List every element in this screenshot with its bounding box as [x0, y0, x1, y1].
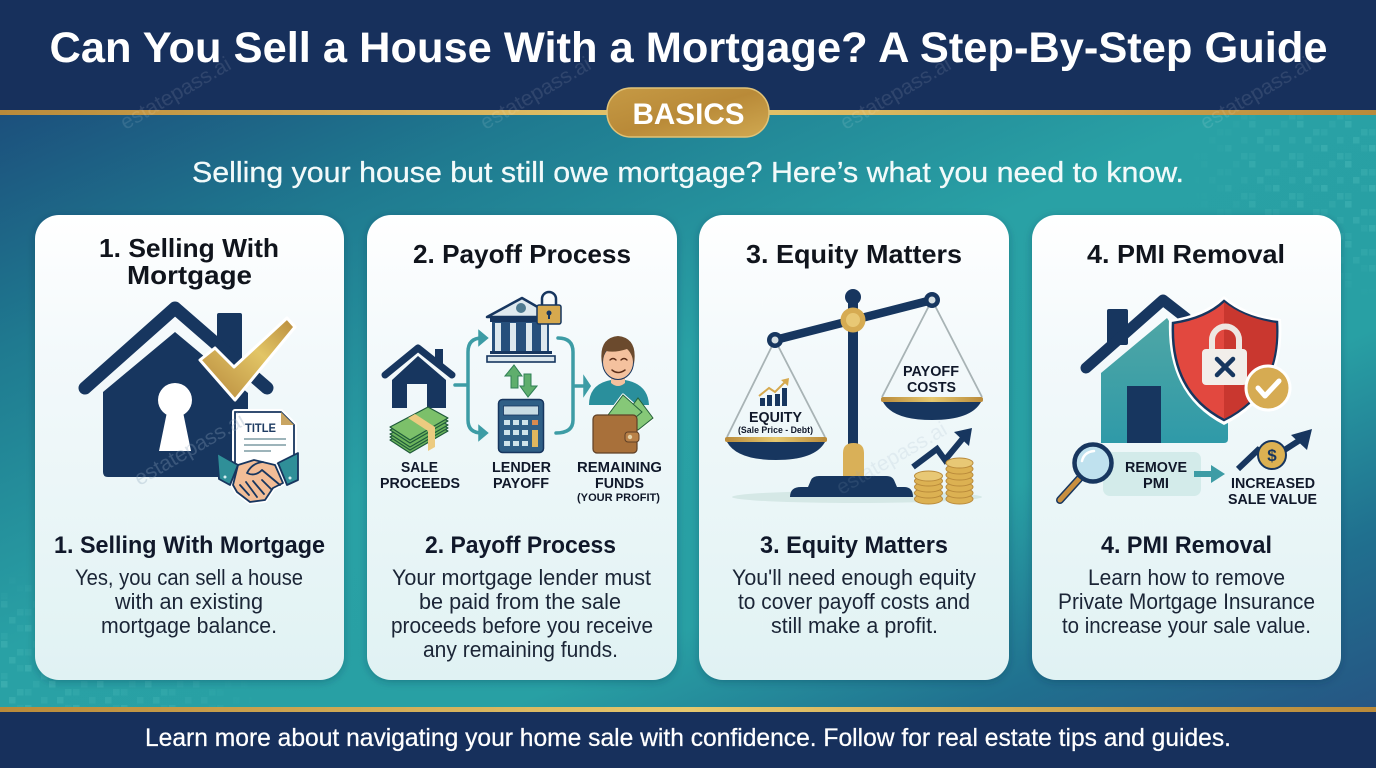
text block: mortgage balance.	[101, 613, 277, 638]
icon: rising dollar	[1238, 429, 1312, 469]
text block: Yes, you can sell a house	[75, 565, 303, 590]
footer band	[0, 712, 1376, 768]
label: remaining funds: (YOUR PROFIT)	[577, 492, 660, 504]
icon: equity bars	[759, 378, 789, 406]
label: remaining funds	[577, 460, 662, 504]
text block: any remaining funds.	[423, 637, 618, 662]
watermarks: estatepass.ai	[1196, 53, 1315, 134]
icon: bank with lock	[487, 292, 561, 362]
icon: person with wallet	[589, 336, 653, 453]
heading: payoff process: 2. Payoff Process	[413, 239, 631, 269]
text block: be paid from the sale	[419, 589, 621, 614]
callout: remove pmi	[1060, 444, 1201, 500]
icon: coin stacks	[914, 458, 973, 504]
label: payoff costs	[903, 364, 959, 396]
label: increased sale value: SALE VALUE	[1228, 492, 1317, 508]
label: equity: EQUITY	[749, 410, 802, 426]
label: payoff costs: COSTS	[907, 380, 956, 396]
watermarks: estatepass.ai	[116, 53, 235, 134]
text block: still make a profit.	[771, 613, 938, 638]
watermarks: estatepass.ai	[476, 53, 595, 134]
text block	[1058, 565, 1315, 638]
subheading: 1. Selling With Mortgage	[54, 532, 325, 559]
text block: Your mortgage lender must	[392, 565, 651, 590]
panel: equity matters	[699, 215, 1009, 680]
arrow: to increased value	[1194, 465, 1225, 483]
title: Can You Sell a House With a Mortgage? A Step-By-Step Guide	[50, 24, 1328, 72]
panel: payoff process	[367, 215, 677, 680]
text block	[391, 565, 653, 662]
icon: rising dollar: $	[1267, 446, 1277, 465]
label: sale proceeds: SALE	[401, 460, 438, 476]
label: equity: (Sale Price - Debt)	[738, 425, 813, 436]
heading: pmi removal: 4. PMI Removal	[1087, 239, 1285, 269]
badge: basics	[607, 88, 769, 137]
footer gold divider	[0, 707, 1376, 712]
header band	[0, 0, 1376, 111]
icon: growth arrow	[913, 428, 972, 467]
watermarks: estatepass.ai	[836, 53, 955, 134]
subheading: 3. Equity Matters	[760, 532, 948, 559]
heading: selling with mortgage	[99, 233, 279, 290]
icon: house with keyhole, check, title and handshake: TITLE	[245, 421, 276, 435]
label: lender payoff: PAYOFF	[493, 476, 549, 492]
text block	[75, 565, 303, 638]
icon: calculator	[498, 400, 544, 452]
label: lender payoff	[492, 460, 552, 492]
icon: house and sale proceeds	[385, 348, 452, 453]
background	[0, 110, 1376, 712]
text block: You'll need enough equity	[732, 565, 976, 590]
label: sale proceeds: PROCEEDS	[380, 476, 460, 492]
watermarks: estatepass.ai	[832, 418, 951, 499]
heading: selling with mortgage: Mortgage	[127, 260, 252, 290]
icon: house with shield	[1086, 296, 1290, 443]
panel: selling with mortgage	[35, 215, 344, 680]
subheading: 4. PMI Removal	[1101, 532, 1272, 559]
icon: house with keyhole, check, title and handshake	[85, 308, 298, 502]
text block: proceeds before you receive	[391, 613, 653, 638]
text block	[732, 565, 976, 638]
label: sale proceeds	[380, 460, 460, 492]
text block: Learn how to remove	[1088, 565, 1285, 590]
footer text: Learn more about navigating your home sale with confidence. Follow for real estate tips and guides.	[145, 724, 1231, 752]
heading: equity matters: 3. Equity Matters	[746, 239, 962, 269]
callout: remove pmi: REMOVE	[1125, 460, 1187, 476]
icon: balance scale	[725, 289, 983, 503]
watermarks: estatepass.ai	[130, 409, 249, 490]
label: remaining funds: FUNDS	[595, 476, 644, 492]
subtitle: Selling your house but still owe mortgage? Here’s what you need to know.	[192, 157, 1184, 189]
gold divider	[0, 110, 1376, 115]
heading: selling with mortgage: 1. Selling With	[99, 233, 279, 263]
panel: pmi removal	[1032, 215, 1341, 680]
icon: swap arrows	[505, 365, 537, 397]
label: increased sale value	[1228, 476, 1317, 508]
label: payoff costs: PAYOFF	[903, 364, 959, 380]
label: increased sale value: INCREASED	[1231, 476, 1315, 492]
badge: basics: BASICS	[632, 98, 744, 131]
label: equity	[738, 410, 813, 436]
arrows: process flow	[455, 333, 589, 438]
subheading: 2. Payoff Process	[425, 532, 616, 559]
watermarks	[116, 53, 1315, 499]
text block: with an existing	[114, 589, 263, 614]
text block: Private Mortgage Insurance	[1058, 589, 1315, 614]
label: lender payoff: LENDER	[492, 460, 552, 476]
text block: to increase your sale value.	[1062, 613, 1311, 638]
label: remaining funds: REMAINING	[577, 460, 662, 476]
callout: remove pmi: PMI	[1143, 476, 1169, 492]
text block: to cover payoff costs and	[738, 589, 970, 614]
